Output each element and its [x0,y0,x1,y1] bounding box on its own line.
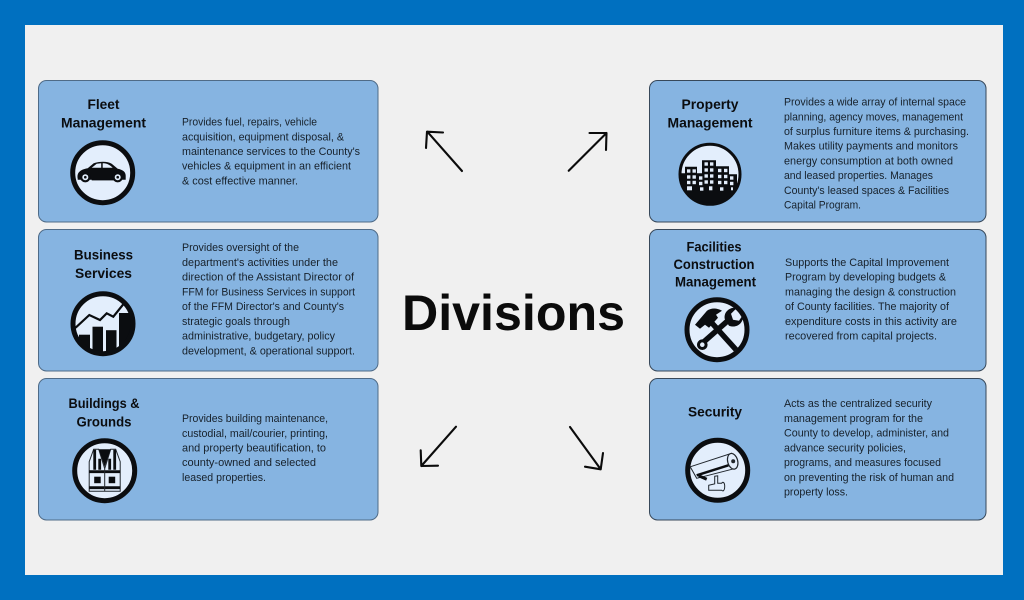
text: Buildings description: and property beautification, to [182,442,326,454]
panel: Buildings & Grounds [38,378,378,520]
text: Buildings description: custodial, mail/courier, printing, [182,428,328,440]
text: Buildings description [182,413,328,484]
text: Property description: Provides a wide array of internal space [784,96,966,108]
text: Business description: strategic goals through [182,316,290,328]
heading: Business Services: Business [74,246,133,262]
heading: Buildings & Grounds: Buildings & [68,395,140,411]
text: Security description: County to develop, administer, and [784,428,949,440]
icon: city buildings [678,144,740,206]
heading: Buildings & Grounds [68,395,140,430]
panel: Business Services [38,230,378,371]
text: Property description: Makes utility payments and monitors [784,141,959,153]
arrow: down right [570,427,603,469]
heading: Property Management [668,96,753,130]
text: Fleet description: & cost effective manner. [182,176,298,188]
text: Fleet description [182,116,361,188]
text: Property description [784,96,969,212]
heading: Security: Security [688,404,742,420]
text: Fleet description: Provides fuel, repairs, vehicle [182,116,317,128]
text: Property description: Capital Program. [784,200,861,212]
arrow: up right [569,133,606,171]
text: Property description: and leased properties. Manages [784,170,934,182]
text: Fleet description: vehicles & equipment in an efficient [182,161,351,173]
icon: bar and line chart [73,294,134,357]
text: Security description: advance security policies, [784,442,906,454]
text: Buildings description: county-owned and selected [182,457,316,469]
text: Fleet description: maintenance services to the County's [182,146,361,158]
text: Business description: department's activities under the [182,257,338,269]
heading: Fleet Management [61,96,146,130]
icon: car [73,143,133,203]
text: Fleet description: acquisition, equipment disposal, & [182,131,345,143]
heading: Facilities Construction Management: Facilities [686,238,742,254]
text: Security description: management program for the [784,413,923,425]
heading: Facilities Construction Management: Management [675,274,756,290]
text: Business description: development, & operational support. [182,345,355,357]
icon: hammer and wrench [687,300,747,360]
text: Facilities description [785,257,957,343]
text: Business description: FFM for Business Services in support [182,286,355,298]
panel: Property Management [650,80,986,222]
text: Business description: of the FFM Director's and County's [182,301,345,313]
text: Property description: County's leased spaces & Facilities [784,185,950,197]
text: Security description [784,398,954,498]
heading: Business Services: Services [75,265,132,281]
text: Facilities description: of County facilities. The majority of [785,301,950,313]
icon: security camera [688,440,748,500]
panel: Fleet Management [38,80,378,222]
text: Buildings description: Provides building maintenance, [182,413,328,425]
text: Security description: programs, and measures focused [784,457,941,469]
heading: Facilities Construction Management [674,238,756,290]
heading: Buildings & Grounds: Grounds [76,414,132,430]
text: Facilities description: Program by developing budgets & [785,272,947,284]
heading: Fleet Management: Management [61,114,146,130]
heading: Business Services [74,246,133,281]
panel: Facilities Construction Management [650,230,986,371]
text: Buildings description: leased properties. [182,472,266,484]
title: Divisions [402,285,625,341]
text: Facilities description: managing the design & construction [785,286,956,298]
text: Security description: Acts as the centralized security [784,398,933,410]
heading: Property Management: Management [668,114,753,130]
heading: Fleet Management: Fleet [88,96,120,112]
arrow: down left [421,427,456,466]
icon: safety vest [75,441,135,501]
heading: Property Management: Property [682,96,739,112]
text: Security description: on preventing the risk of human and [784,472,954,484]
arrow: up left [426,132,462,171]
heading: Facilities Construction Management: Construction [674,256,754,272]
panel: Security [650,378,986,520]
text: Security description: property loss. [784,486,848,498]
text: Property description: planning, agency moves, management [784,111,963,123]
text: Facilities description: recovered from capital projects. [785,331,937,343]
text: Business description [182,242,355,357]
text: Business description: direction of the Assistant Director of [182,272,355,284]
text: Facilities description: Supports the Capital Improvement [785,257,949,269]
text: Business description: Provides oversight of the [182,242,299,254]
text: Business description: administrative, budgetary, policy [182,330,336,342]
text: Property description: energy consumption at both owned [784,156,953,168]
text: Property description: of surplus furniture items & purchasing. [784,126,969,138]
text: Facilities description: expenditure costs in this activity are [785,316,957,328]
